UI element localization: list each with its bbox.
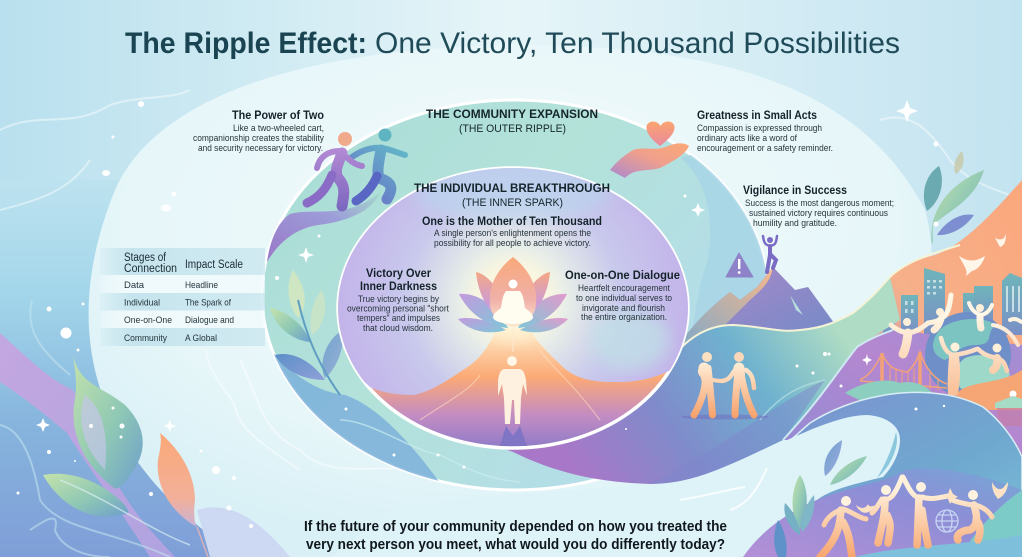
- table: stages of connection and impact scale: Data: [124, 280, 145, 291]
- main ripple wave with handshake: [480, 245, 960, 484]
- table: stages of connection and impact scale: The Spark of: [185, 298, 231, 308]
- outer ripple: the community expansion: [255, 100, 780, 490]
- text block: victory over inner darkness: Inner Darkness: [360, 279, 437, 293]
- text block: victory over inner darkness: Victory Over: [366, 266, 431, 280]
- text block: the power of two: companionship creates the stability: [193, 133, 324, 144]
- icon: doves: [959, 234, 1006, 276]
- icon: bottom doves: [856, 482, 1008, 513]
- inner heading: [414, 181, 610, 209]
- text block: one-on-one dialogue: Heartfelt encouragement: [578, 283, 670, 294]
- text block: one-on-one dialogue: to one individual serves to: [576, 293, 672, 304]
- text block: one-on-one dialogue: One-on-One Dialogue: [565, 268, 680, 282]
- text block: vigilance in success: Success is the most dangerous moment;: [745, 198, 894, 209]
- text block: victory over inner darkness: overcoming personal "short: [347, 304, 449, 314]
- community expansion heading: THE COMMUNITY EXPANSION: [426, 107, 598, 121]
- text block: the power of two: [193, 108, 324, 154]
- text block: vigilance in success: sustained victory requires continuous: [749, 208, 888, 219]
- orange flow with city: [860, 180, 1022, 420]
- inner circle: the individual breakthrough: [330, 160, 700, 448]
- bottom purple wave with people: [743, 468, 1022, 557]
- closing question: very next person you meet, what would you do differently today?: [306, 537, 725, 553]
- icon: small pagoda: [995, 390, 1022, 426]
- title: One Victory, Ten Thousand Possibilities: [375, 27, 900, 60]
- text block: greatness in small acts: Greatness in Small Acts: [697, 108, 817, 122]
- text block: victory over inner darkness: tempers" and impulses: [357, 313, 440, 324]
- inner heading: THE INDIVIDUAL BREAKTHROUGH: [414, 181, 610, 195]
- table: stages of connection and impact scale: One-on-One: [124, 315, 172, 326]
- table: stages of connection and impact scale: Headline: [185, 280, 218, 291]
- icon: warning triangle: [726, 253, 753, 277]
- text block: the power of two: The Power of Two: [232, 108, 324, 122]
- title: [125, 27, 900, 60]
- icon: city skyline: [883, 268, 1022, 335]
- text block: victory over inner darkness: that cloud wisdom.: [363, 323, 433, 334]
- text block: one-on-one dialogue: [565, 268, 680, 323]
- icon: upper right leaves: [924, 151, 984, 244]
- plant inside outer ripple: [270, 270, 343, 395]
- icon: plant at wave edge: [774, 475, 814, 557]
- table: stages of connection and impact scale: Connection: [124, 263, 177, 275]
- left decorative leaves: [43, 355, 208, 557]
- community expansion heading: [426, 107, 598, 135]
- title: The Ripple Effect:: [125, 27, 367, 60]
- text block: greatness in small acts: ordinary acts like a word of: [697, 133, 797, 144]
- text block: one is the mother of ten thousand: One is the Mother of Ten Thousand: [422, 214, 602, 228]
- text block: greatness in small acts: [697, 108, 833, 154]
- icon: community figures joining hands: [820, 477, 992, 557]
- icon: two companions walking: [307, 128, 405, 206]
- table: stages of connection and impact scale: [100, 248, 265, 346]
- purple hand under two figures: [267, 192, 381, 262]
- closing question: [304, 519, 727, 553]
- purple wave with bridge and globe: [783, 295, 1022, 470]
- white curl wave: [330, 415, 900, 557]
- closing question: If the future of your community depended on how you treated the: [304, 519, 727, 535]
- icon: bridge: [860, 352, 947, 390]
- icon: celebrating figures on globe: [891, 295, 1022, 393]
- table: stages of connection and impact scale: Impact Scale: [185, 259, 243, 271]
- table: stages of connection and impact scale: Dialogue and: [185, 315, 234, 326]
- icon: globe: [925, 312, 1011, 398]
- text block: the power of two: Like a two-wheeled cart,: [233, 123, 324, 134]
- sparkles and light dots: [16, 100, 945, 528]
- left blue wave area: [0, 300, 290, 557]
- table: stages of connection and impact scale: A Global: [185, 333, 217, 344]
- icon: standing person with reflection: [498, 356, 527, 446]
- table: stages of connection and impact scale: Stages of: [124, 252, 167, 264]
- text block: vigilance in success: humility and gratitude.: [753, 218, 837, 229]
- icon: lotus with meditating figure: [458, 257, 568, 352]
- text block: the power of two: and security necessary for victory.: [198, 143, 323, 154]
- text block: greatness in small acts: Compassion is expressed through: [697, 123, 822, 134]
- table: stages of connection and impact scale: Community: [124, 333, 167, 344]
- icon: small leaves on the curl: [824, 440, 867, 485]
- text block: one-on-one dialogue: invigorate and flourish: [582, 303, 665, 314]
- icon: two people shaking hands: [681, 352, 769, 420]
- text block: one is the mother of ten thousand: A single person's enlightenment opens the: [434, 228, 591, 238]
- community expansion heading: (THE OUTER RIPPLE): [459, 123, 566, 135]
- icon: globe outline: [936, 510, 958, 532]
- text block: victory over inner darkness: True victory begins by: [358, 294, 439, 305]
- text block: greatness in small acts: encouragement or a safety reminder.: [697, 143, 833, 154]
- text block: vigilance in success: [743, 183, 894, 229]
- text block: one is the mother of ten thousand: possibility for all people to achieve victory.: [434, 238, 591, 248]
- inner heading: (THE INNER SPARK): [462, 197, 563, 209]
- table: stages of connection and impact scale: Individual: [124, 298, 160, 308]
- icon: hand holding heart: [610, 122, 689, 178]
- blue crest wave: [720, 392, 1022, 557]
- text block: one is the mother of ten thousand: [422, 214, 602, 248]
- text block: vigilance in success: Vigilance in Success: [743, 183, 847, 197]
- text block: victory over inner darkness: [347, 266, 449, 334]
- text block: one-on-one dialogue: the entire organization.: [581, 312, 667, 323]
- icon: mountain with climber: [677, 236, 837, 347]
